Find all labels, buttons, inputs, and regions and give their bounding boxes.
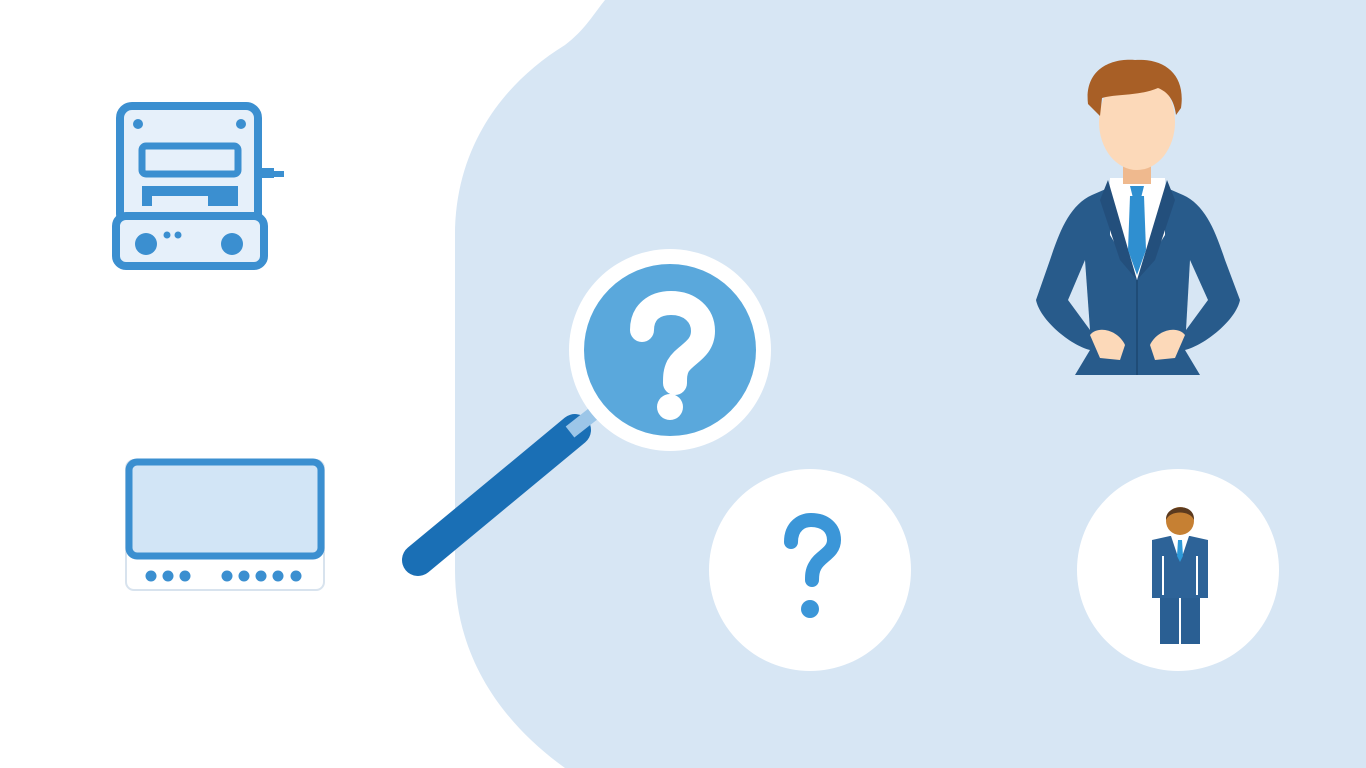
- icon: device: [116, 106, 284, 266]
- background blob: [455, 0, 1366, 768]
- figure: businessman: [1036, 60, 1240, 375]
- circle: small person: [1077, 469, 1279, 671]
- icon: monitor: [126, 460, 324, 590]
- circle: question: [709, 469, 911, 671]
- icon: magnifier with question: [418, 249, 771, 560]
